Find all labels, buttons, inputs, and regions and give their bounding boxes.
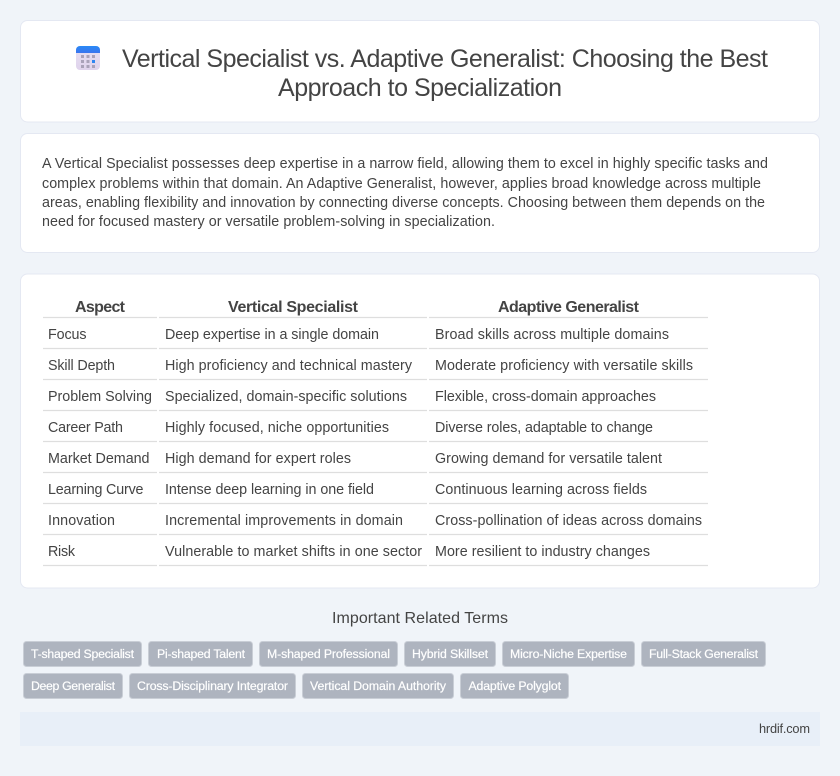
title: Vertical Specialist vs. Adaptive Generalist: Choosing the Best	[122, 45, 768, 73]
row: Career Path: Diverse roles, adaptable to change	[435, 420, 653, 436]
row: Focus: Deep expertise in a single domain	[165, 327, 379, 343]
heading: related terms: Important Related Terms	[332, 610, 508, 627]
tag: Vertical Domain Authority	[302, 674, 454, 698]
intro text: complex problems within that domain. An Adaptive Generalist, however, applies broad knowledge across multiple	[42, 176, 761, 192]
row: Skill Depth	[48, 358, 693, 374]
tag: Micro-Niche Expertise: Micro-Niche Expertise	[510, 647, 627, 661]
row: Career Path	[48, 420, 653, 436]
icon: calendar	[76, 46, 100, 70]
intro text: A Vertical Specialist possesses deep expertise in a narrow field, allowing them to excel in highly specific tasks and	[42, 156, 768, 172]
row: Innovation: Cross-pollination of ideas across domains	[435, 513, 702, 529]
row: Problem Solving: Flexible, cross-domain approaches	[435, 389, 656, 405]
tag: T-shaped Specialist: T-shaped Specialist	[31, 647, 135, 661]
tag: M-shaped Professional: M-shaped Professional	[267, 647, 390, 661]
tag: Adaptive Polyglot	[460, 674, 568, 698]
panel: introduction	[20, 134, 820, 252]
tag: Full-Stack Generalist	[642, 642, 766, 666]
tag: Cross-Disciplinary Integrator: Cross-Disciplinary Integrator	[137, 679, 288, 693]
tag: Deep Generalist: Deep Generalist	[31, 679, 116, 693]
row: Problem Solving: Problem Solving	[48, 389, 152, 405]
tag: Full-Stack Generalist: Full-Stack Generalist	[649, 647, 759, 661]
tag: Hybrid Skillset	[404, 642, 496, 666]
tag: M-shaped Professional	[260, 642, 398, 666]
row: Focus: Broad skills across multiple domains	[435, 327, 669, 343]
tag: Adaptive Polyglot: Adaptive Polyglot	[468, 679, 562, 693]
row: Risk	[48, 544, 650, 560]
table header: Aspect	[75, 299, 126, 316]
panel: header	[20, 20, 820, 122]
row: Focus: Focus	[48, 327, 86, 343]
row: Learning Curve	[48, 482, 647, 498]
row: Innovation	[48, 513, 702, 529]
row: Innovation: Incremental improvements in domain	[165, 513, 403, 529]
row: Risk: More resilient to industry changes	[435, 544, 650, 560]
row: Risk: Vulnerable to market shifts in one sector	[165, 544, 422, 560]
footer	[20, 712, 820, 746]
table header	[75, 299, 640, 316]
footer: hrdif.com	[759, 721, 810, 736]
table header: Adaptive Generalist	[498, 299, 640, 316]
table header: Vertical Specialist	[228, 299, 359, 316]
panel: comparison table	[20, 274, 820, 588]
row: Market Demand: High demand for expert roles	[165, 451, 351, 467]
panel: related term tags	[24, 642, 766, 698]
row: Innovation: Innovation	[48, 513, 115, 529]
row: Learning Curve: Intense deep learning in one field	[165, 482, 374, 498]
tag: T-shaped Specialist	[24, 642, 142, 666]
tag: Cross-Disciplinary Integrator	[130, 674, 296, 698]
row: Career Path: Career Path	[48, 420, 123, 436]
row: Learning Curve: Learning Curve	[48, 482, 144, 498]
row: Market Demand: Market Demand	[48, 451, 150, 467]
tag: Pi-shaped Talent	[148, 642, 252, 666]
intro text: need for focused mastery or versatile problem-solving in specialization.	[42, 214, 495, 230]
row: Skill Depth: High proficiency and technical mastery	[165, 358, 413, 374]
row: Market Demand: Growing demand for versatile talent	[435, 451, 662, 467]
row: Focus	[48, 327, 669, 343]
tag: Micro-Niche Expertise	[502, 642, 634, 666]
row: Problem Solving: Specialized, domain-specific solutions	[165, 389, 407, 405]
title: Approach to Specialization	[278, 74, 562, 102]
row: Skill Depth: Moderate proficiency with versatile skills	[435, 358, 693, 374]
title	[122, 45, 768, 102]
row: Market Demand	[48, 451, 662, 467]
row: Skill Depth: Skill Depth	[48, 358, 115, 374]
tag: Pi-shaped Talent: Pi-shaped Talent	[157, 647, 246, 661]
intro text: areas, enabling flexibility and innovation by connecting diverse concepts. Choosing between them depends on the	[42, 195, 765, 211]
tag: Hybrid Skillset: Hybrid Skillset	[412, 647, 489, 661]
tag: Vertical Domain Authority: Vertical Domain Authority	[310, 679, 447, 693]
row: Problem Solving	[48, 389, 656, 405]
row: Risk: Risk	[48, 544, 76, 560]
row: Career Path: Highly focused, niche opportunities	[165, 420, 389, 436]
tag: Deep Generalist	[24, 674, 122, 698]
row: Learning Curve: Continuous learning across fields	[435, 482, 647, 498]
intro text	[42, 156, 768, 230]
